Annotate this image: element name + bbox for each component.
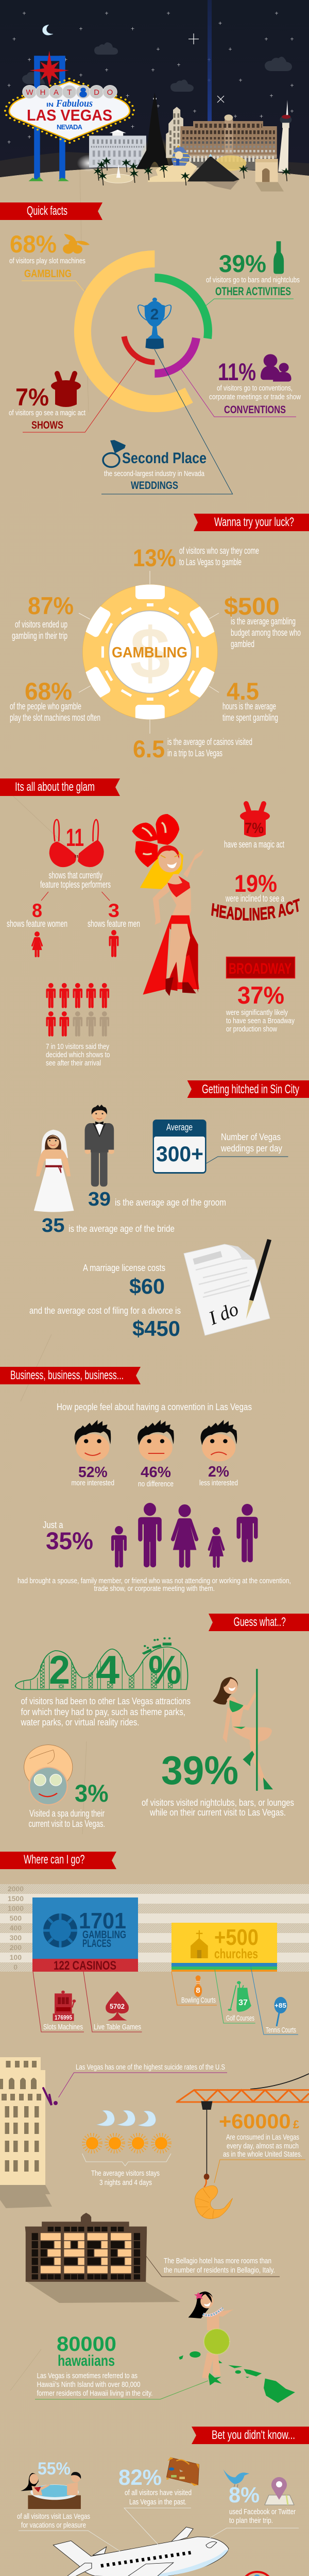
stat: shows 7%: of visitors go see a magic act <box>9 409 86 417</box>
stat: 13% come to gamble: 13% <box>133 544 176 571</box>
callout: slot machines: Slots Machines <box>43 2023 83 2031</box>
stat: 52% more interested: 52% <box>78 1464 108 1481</box>
stat: 2% less interested: 2% <box>208 1464 229 1480</box>
stat: 300+ weddings per day: Average <box>166 1122 193 1132</box>
stat: 19% headliner act: 19% <box>234 870 277 897</box>
callout: slot machines <box>33 1972 84 2032</box>
icon: trophy <box>138 298 171 349</box>
text: attractions: water parks, or virtual reality rides. <box>21 1717 139 1727</box>
stat: gambling 68% <box>9 230 90 291</box>
stat: 3 shows feature men: shows feature men <box>88 919 140 929</box>
stat: 3 nights 4 days <box>82 2110 171 2187</box>
heading: quick facts banner <box>0 202 102 220</box>
stat: bride age 35: 35 <box>42 1215 65 1236</box>
stat: shows 7% <box>9 360 136 432</box>
text: attractions <box>21 1696 191 1727</box>
icon: gambling chip: GAMBLING <box>112 645 187 661</box>
stat: 3% spa: Visited a spa during their <box>29 1808 105 1819</box>
pictogram: 7 in 10 visitors: decided which shows to <box>46 1050 110 1059</box>
stat: 3% spa <box>29 1780 108 1829</box>
chart: striped scale: 500 <box>10 1914 22 1922</box>
stat: 13% come to gamble: to Las Vegas to gamble <box>179 557 242 567</box>
stat: +60000 pounds of shrimp <box>214 2110 305 2183</box>
stat: just a 35% brought family: Just a <box>43 1520 63 1530</box>
stat: just a 35% brought family <box>18 1503 291 1593</box>
welcome sign: A <box>54 88 59 97</box>
stat: 8 shows feature women: 8 <box>32 900 42 921</box>
stat: weddings second place: Second Place <box>122 450 207 467</box>
panel: bet you didn't know <box>14 2427 309 2576</box>
bar: gambling places: GAMBLING <box>82 1929 126 1941</box>
heading: quick facts banner: Quick facts <box>27 204 67 218</box>
connector lines <box>79 571 219 734</box>
illustration: spa face mask <box>24 1745 73 1805</box>
text: how people feel: How people feel about having a convention in Las Vegas <box>57 1402 252 1412</box>
bar: churches and sports <box>171 1923 277 1972</box>
heading: business banner <box>0 1367 141 1384</box>
text: Bellagio fact <box>146 2256 280 2277</box>
stat: weddings second place <box>101 349 233 494</box>
illustration: marriage license and pen <box>184 1239 271 1335</box>
stat: 80000 hawaiians: 80000 <box>57 2333 116 2355</box>
stat: 3 nights 4 days: The average visitors stays <box>91 2169 160 2178</box>
stat: 7% no kids allowed <box>165 2572 292 2576</box>
welcome sign: O <box>107 88 113 97</box>
stat: 37% broadway <box>226 957 295 1033</box>
chart: striped scale: 400 <box>10 1924 22 1932</box>
stat: 4.5 hours: 4.5 <box>227 677 259 705</box>
stat: 80000 hawaiians: hawaiians <box>58 2352 115 2369</box>
stat: 19% headliner act: HEADLINER ACT <box>211 899 300 921</box>
stat: 3% spa: 3% <box>75 1780 108 1807</box>
panel: business business business <box>0 1367 291 1593</box>
pictogram: 7 in 10 visitors: 7 in 10 visitors said they <box>46 1042 109 1051</box>
panel: getting hitched in sin city <box>29 1080 309 1341</box>
chart: striped scale: 1000 <box>8 1904 24 1912</box>
stat: 7% magic act: 7% <box>245 820 264 837</box>
stat: 82% visited in the past: of all visitors have visited <box>125 2488 192 2497</box>
callout: bowling courts <box>171 1972 217 2005</box>
clouds <box>22 42 292 92</box>
stat: 4.5 hours: time spent gambling <box>222 713 278 723</box>
stat: gambling 68%: GAMBLING <box>24 268 72 280</box>
welcome sign: D <box>94 88 99 97</box>
chart: striped scale: 0 <box>13 1963 18 1971</box>
heading: business banner: Business, business, business... <box>10 1368 124 1382</box>
stat: 55% vacation: 55% <box>38 2459 71 2479</box>
illustration: groom <box>85 1105 114 1187</box>
stat: $500 budget <box>224 592 301 649</box>
stat: other activities 39%: 39% <box>219 250 266 277</box>
stat: 6.5 casinos: in a trip to Las Vegas <box>167 748 222 758</box>
stat: 87% gambled: of visitors ended up <box>15 619 67 630</box>
stat: 68% slot machines <box>10 677 100 723</box>
stat: 37% broadway: were significantly likely <box>226 1008 288 1017</box>
stat: 68% slot machines: play the slot machines most often <box>10 713 100 723</box>
stat: 13% come to gamble <box>133 544 259 571</box>
bar: gambling places <box>32 1897 138 1973</box>
stat: 300+ weddings per day <box>153 1120 288 1174</box>
stat: license and divorce costs: $450 <box>132 1316 180 1341</box>
text: Bellagio fact: The Bellagio hotel has more rooms than <box>164 2257 271 2265</box>
chart: roller coaster 24% <box>15 1637 188 1692</box>
text: suicide rates <box>59 2063 227 2097</box>
stat: 300+ weddings per day: 300+ <box>156 1142 203 1166</box>
chart: radial activity rings <box>82 259 208 403</box>
stat: license and divorce costs: and the average cost of filing for a divorce is <box>29 1306 181 1316</box>
stat: 68% slot machines: 68% <box>25 677 72 705</box>
stat: 8% social media <box>209 2469 299 2538</box>
panel: wanna try your luck <box>10 514 309 762</box>
stat: license and divorce costs <box>29 1263 181 1341</box>
text: suicide rates: Las Vegas has one of the highest suicide rates of the U.S <box>76 2063 225 2072</box>
stat: 3% spa: current visit to Las Vegas. <box>29 1819 105 1829</box>
panel: odd facts <box>0 2057 309 2403</box>
light beam <box>208 0 212 124</box>
stat: +60000 pounds of shrimp: £ <box>293 2118 300 2131</box>
stat: 11 topless shows with bra: 11 <box>66 824 84 852</box>
stat: 13% come to gamble: of visitors who say they come <box>179 546 259 556</box>
welcome sign: H <box>40 88 45 97</box>
stat: 11 topless shows with bra: shows that currently <box>48 870 102 880</box>
stat: 300+ weddings per day: Number of Vegas <box>221 1132 281 1142</box>
stat: 82% visited in the past: Las Vegas in the past. <box>129 2498 186 2506</box>
stat: 300+ weddings per day: weddings per day <box>220 1143 282 1154</box>
stat: 87% gambled <box>12 592 74 641</box>
illustration: showgirl <box>132 814 204 996</box>
stat: 46% no difference <box>138 1420 174 1488</box>
stat: 39% nightclubs: while on their current visit to Las Vegas. <box>149 1807 286 1818</box>
stat: bride age 35 <box>42 1215 175 1236</box>
stat: 80000 hawaiians: Hawaii's Ninth Island with over 80,000 <box>37 2380 140 2389</box>
chart: striped scale: 300 <box>10 1934 22 1942</box>
stat: 8% social media: to plan their trip. <box>229 2516 273 2525</box>
stat: conventions 11%: 11% <box>218 358 256 385</box>
callout: tennis courts <box>250 1964 298 2035</box>
heading: luck banner <box>194 514 309 531</box>
callout: live table games <box>83 1972 142 2032</box>
stat: 46% no difference: no difference <box>138 1480 174 1488</box>
icon: gambling chip: $ <box>130 613 170 693</box>
stat: $500 budget: $500 <box>224 592 280 620</box>
stat: conventions 11% <box>181 354 301 417</box>
heading: bet banner <box>192 2427 309 2444</box>
stat: 8 shows feature women: shows feature women <box>7 919 67 929</box>
welcome sign: LAS VEGAS <box>27 106 112 124</box>
stat: 11 topless shows with bra <box>40 820 111 901</box>
icon: moon <box>42 25 53 35</box>
stat: 37% broadway: or production show <box>226 1025 277 1033</box>
stat: 6.5 casinos: 6.5 <box>133 735 165 762</box>
panel: guess what <box>15 1614 309 1829</box>
stat: just a 35% brought family: trade show, or corporate meeting with them. <box>94 1584 215 1593</box>
bar: gambling places: 122 CASINOS <box>54 1959 116 1973</box>
welcome sign <box>5 50 134 181</box>
stat: gambling 68%: of visitors play slot machines <box>9 257 85 265</box>
buildings of the strip <box>77 93 291 192</box>
heading: where banner <box>0 1852 116 1869</box>
stat: license and divorce costs: A marriage license costs <box>83 1263 165 1273</box>
icon: gambling chip <box>82 582 218 722</box>
stat: license and divorce costs: $60 <box>129 1274 165 1298</box>
stat: 39% nightclubs <box>142 1748 294 1818</box>
stat: 11 topless shows with bra: feature topless performers <box>40 879 111 890</box>
icon: trophy: 2 <box>150 306 159 323</box>
chart: roller coaster 24%: 2 <box>49 1647 70 1692</box>
chart: striped scale: 2000 <box>8 1885 24 1893</box>
stat: 52% more interested <box>71 1420 114 1487</box>
stat: 8 shows feature women <box>7 900 67 957</box>
illustration: marriage license and pen: I do <box>205 1298 242 1330</box>
pictogram: 7 in 10 visitors: see after their arrival <box>46 1059 101 1067</box>
illustration: pole dancer <box>213 1669 273 1791</box>
stat: 4.5 hours: hours is the average <box>222 701 276 711</box>
stat: 8% social media: 8% <box>229 2483 260 2507</box>
illustration: airplane <box>53 2527 229 2576</box>
heading: where banner: Where can I go? <box>24 1853 84 1867</box>
illustration: crane and shrimp <box>176 2074 309 2219</box>
welcome sign: Fabulous <box>56 98 93 109</box>
stat: 7% magic act <box>224 804 284 850</box>
panel: where can I go <box>0 1852 309 2035</box>
stat: 82% visited in the past: 82% <box>118 2465 162 2490</box>
chart: striped scale <box>0 1884 309 1972</box>
callout: bowling courts: Bowling Courts <box>181 1996 216 2005</box>
stat: groom age 39: 39 <box>88 1189 111 1210</box>
stat: 68% slot machines: of the people who gamble <box>10 701 81 711</box>
callout: bowling courts: 8 <box>196 1986 200 1995</box>
illustration: hula dancer and Hawaiian islands <box>179 2292 295 2403</box>
stat: 6.5 casinos: is the average of casinos visited <box>167 737 252 747</box>
callout: tennis courts: +85 <box>274 2002 286 2009</box>
illustration: tall building with falling man <box>0 2057 58 2208</box>
stat: 6.5 casinos <box>133 735 252 762</box>
stat: bride age 35: is the average age of the bride <box>68 1224 175 1234</box>
heading: wedding banner <box>187 1080 309 1098</box>
bar: churches and sports: churches <box>214 1946 258 1961</box>
stat: 82% visited in the past <box>118 2457 199 2546</box>
stat: groom age 39 <box>88 1189 226 1210</box>
callout: live table games: 5702 <box>110 2002 125 2010</box>
chart: striped scale: 200 <box>10 1943 22 1952</box>
chart: roller coaster 24%: % <box>148 1647 181 1692</box>
welcome sign: IN <box>46 102 54 108</box>
stat: weddings second place: WEDDINGS <box>131 480 178 492</box>
pictogram: 7 in 10 visitors <box>46 983 110 1067</box>
stat: conventions 11%: CONVENTIONS <box>224 404 286 416</box>
chart: roller coaster 24%: 4 <box>96 1647 119 1692</box>
stat: 52% more interested: more interested <box>71 1479 114 1487</box>
stat: 46% no difference: 46% <box>141 1464 171 1481</box>
stat: 80000 hawaiians: Las Vegas is sometimes referred to as <box>37 2371 138 2380</box>
callout: golf courses <box>215 1970 255 2023</box>
chart: striped scale: 100 <box>10 1953 22 1961</box>
stat: other activities 39% <box>206 241 300 306</box>
stat: 4.5 hours <box>222 677 278 723</box>
heading: guess what banner <box>209 1614 309 1631</box>
bar: churches and sports: +500 <box>214 1925 259 1950</box>
stat: 2% less interested: less interested <box>199 1479 238 1487</box>
callout: golf courses: 37 <box>238 1998 248 2007</box>
callout: slot machines: 176995 <box>55 2014 72 2021</box>
chart: striped scale: 1500 <box>8 1894 24 1903</box>
bar: gambling places: 1701 <box>79 1908 126 1934</box>
stat: 55% vacation: for vacations or pleasure <box>21 2521 86 2530</box>
welcome sign: NEVADA <box>57 123 83 131</box>
stat: 80000 hawaiians <box>35 2333 208 2399</box>
text: attractions: for which they had to pay, such as theme parks, <box>21 1707 185 1717</box>
stat: 87% gambled: gambling in their trip <box>12 631 67 641</box>
welcome sign: T <box>67 88 72 97</box>
stat: shows 7%: 7% <box>15 383 49 411</box>
stat: shows 7%: SHOWS <box>31 419 63 431</box>
stat: 37% broadway: 37% <box>237 981 284 1009</box>
stat: 55% vacation <box>17 2459 120 2551</box>
panel: quick facts <box>0 202 301 494</box>
header: night sky and Las Vegas skyline <box>0 0 309 192</box>
icon: magic hat <box>51 374 81 407</box>
stat: 87% gambled: 87% <box>28 592 74 619</box>
callout: golf courses: Golf Courses <box>226 2014 254 2023</box>
illustration: Bellagio 3933 rooms <box>25 2213 180 2303</box>
text: attractions: of visitors had been to other Las Vegas attractions <box>21 1696 191 1706</box>
stat: 3 shows feature men <box>88 900 140 957</box>
stat: gambling 68%: 68% <box>10 230 57 258</box>
stat: 2% less interested <box>199 1420 238 1487</box>
night sky <box>0 0 309 177</box>
welcome sign: W <box>26 88 33 97</box>
stat: 39% nightclubs: 39% <box>161 1748 238 1793</box>
heading: glam banner <box>0 778 120 796</box>
stat: $500 budget: gambled <box>231 639 254 649</box>
callout: live table games: Live Table Games <box>94 2023 141 2031</box>
heading: glam banner: Its all about the glam <box>15 780 95 794</box>
stat: just a 35% brought family: 35% <box>46 1527 93 1554</box>
stat: 55% vacation: of all visitors visit Las Vegas <box>17 2512 90 2521</box>
panel: all about the glam <box>0 778 300 1067</box>
stat: +60000 pounds of shrimp: +60000 <box>219 2110 290 2133</box>
text: Bellagio fact: the number of residents in Bellagio, Italy. <box>164 2266 275 2275</box>
stat: weddings second place: the second-largest industry in Nevada <box>104 469 205 478</box>
stat: 3 shows feature men: 3 <box>108 900 119 921</box>
stat: 19% headliner act <box>211 870 300 921</box>
stat: 80000 hawaiians: former residents of Hawaii living in the city. <box>37 2389 152 2398</box>
stat: 3 nights 4 days: 3 nights and 4 days <box>99 2178 152 2187</box>
bar: gambling places: PLACES <box>82 1938 111 1950</box>
stat: groom age 39: is the average age of the groom <box>115 1197 226 1208</box>
illustration: bride <box>34 1130 74 1212</box>
